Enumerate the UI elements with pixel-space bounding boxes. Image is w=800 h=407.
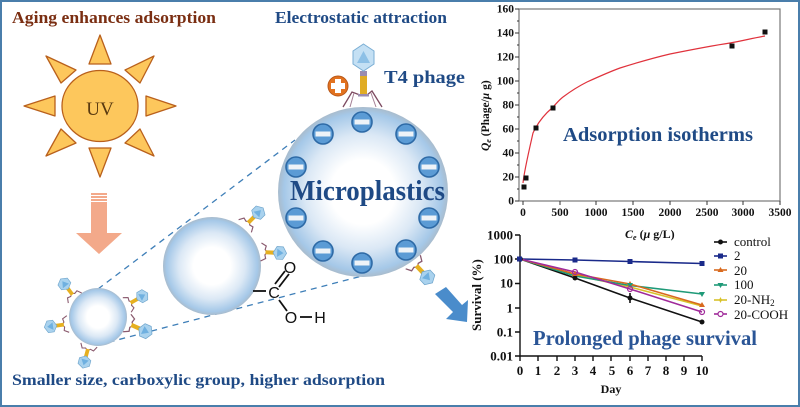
icon: UV sun <box>24 35 176 177</box>
chart: phage survival: 6 <box>627 363 634 378</box>
chart: adsorption isotherm: C <box>625 227 634 241</box>
carboxylic group <box>253 260 326 327</box>
legend: 2 <box>734 248 740 263</box>
chart: adsorption isotherm: 40 <box>502 148 514 160</box>
dashed zoom lines <box>98 140 362 345</box>
chart: phage survival: Day <box>601 382 621 396</box>
chart: phage survival: 5 <box>609 363 616 378</box>
chart: phage survival: 1000 <box>487 228 513 242</box>
legend: 100 <box>734 277 754 292</box>
chart: adsorption isotherm: 1000 <box>584 207 608 219</box>
heading: electrostatic attraction: Electrostatic attraction <box>275 8 447 27</box>
chart: adsorption isotherm: 500 <box>551 207 569 219</box>
chart: adsorption isotherm: 80 <box>502 100 514 112</box>
chart: phage survival: 10 <box>500 276 513 290</box>
chart: phage survival: 2 <box>554 363 560 378</box>
chart: phage survival: 100 <box>494 252 513 266</box>
legend: 20-NH <box>734 292 770 307</box>
chart: adsorption isotherm: 20 <box>502 172 514 184</box>
chart: adsorption isotherm: 0 <box>508 196 514 208</box>
chart: adsorption isotherm: ( <box>637 227 644 241</box>
chart: adsorption isotherm: μ g/L) <box>644 227 675 241</box>
medium microplastic <box>163 201 287 315</box>
small microplastic with phages <box>43 274 156 370</box>
heading: adsorption isotherms: Adsorption isotherms <box>563 124 753 146</box>
data points <box>522 30 768 190</box>
legend: control <box>734 234 771 249</box>
heading: aging enhances adsorption: Aging enhances adsorption <box>12 8 217 27</box>
arrow: to charts <box>435 287 468 322</box>
carboxylic group: O <box>285 310 297 327</box>
fitted curve <box>523 36 765 183</box>
carboxylic group: O <box>284 260 296 277</box>
chart: phage survival: 0 <box>517 363 523 378</box>
chart: adsorption isotherm: 140 <box>497 28 514 40</box>
chart: phage survival: Survival (%) <box>469 259 484 331</box>
series <box>520 259 702 322</box>
chart: adsorption isotherm: 3500 <box>768 207 792 219</box>
chart: phage survival: 0.1 <box>497 324 513 340</box>
chart: adsorption isotherm: 3000 <box>732 207 755 219</box>
chart: phage survival: 7 <box>645 363 652 378</box>
chart: adsorption isotherm: e <box>484 139 493 143</box>
icon: UV sun: UV <box>86 99 114 120</box>
chart: adsorption isotherm: 1500 <box>622 207 645 219</box>
chart: adsorption isotherm: μ g) <box>480 80 492 99</box>
markers <box>517 256 705 324</box>
chart: phage survival: 9 <box>681 363 688 378</box>
large microplastic <box>278 107 448 290</box>
chart: phage survival <box>469 228 788 396</box>
chart: adsorption isotherm: 100 <box>497 76 514 88</box>
legend: 20 <box>734 263 747 278</box>
carboxylic group: C <box>268 285 280 302</box>
chart: adsorption isotherm <box>480 4 792 242</box>
icon: positive charge <box>328 76 348 96</box>
negative charges <box>286 112 439 273</box>
icon: T4 phage <box>343 44 382 107</box>
legend: 2 <box>770 298 775 308</box>
chart: adsorption isotherm: 60 <box>502 124 514 136</box>
legend <box>714 234 788 322</box>
chart: adsorption isotherm: 2000 <box>658 207 682 219</box>
chart: adsorption isotherm: 160 <box>497 4 514 16</box>
chart: adsorption isotherm: 0 <box>520 207 526 219</box>
heading: prolonged phage survival: Prolonged phage survival <box>533 326 757 350</box>
arrow: aging down <box>76 193 122 254</box>
chart: adsorption isotherm: 2500 <box>696 207 719 219</box>
chart: adsorption isotherm: Q <box>480 143 492 151</box>
chart: phage survival: 4 <box>590 363 597 378</box>
chart: phage survival: 8 <box>663 363 670 378</box>
chart: adsorption isotherm: e <box>633 233 637 242</box>
chart: phage survival: 10 <box>696 363 708 378</box>
caption: Smaller size, carboxylic group, higher adsorption <box>12 372 385 389</box>
chart: phage survival: 0.01 <box>490 348 513 364</box>
chart: adsorption isotherm: 120 <box>497 52 514 64</box>
carboxylic group: H <box>314 310 326 327</box>
label: T4 phage: T4 phage <box>384 67 465 87</box>
label: Microplastics: Microplastics <box>290 175 445 207</box>
chart: adsorption isotherm: (Phage/ <box>480 98 492 139</box>
legend: 20-COOH <box>734 307 788 322</box>
chart: phage survival: 1 <box>506 300 513 316</box>
chart: phage survival: 3 <box>572 363 579 378</box>
chart: phage survival: 1 <box>535 363 541 378</box>
